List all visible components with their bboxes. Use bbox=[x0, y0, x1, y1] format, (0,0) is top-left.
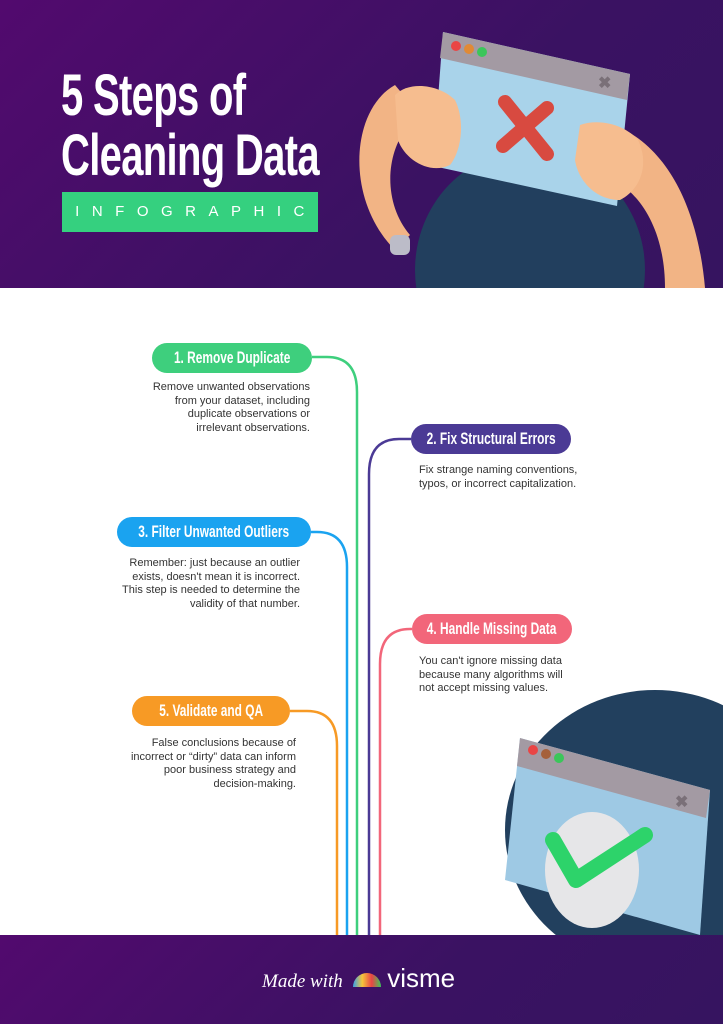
step 4 pill: 4. Handle Missing Data bbox=[427, 619, 557, 638]
step 5 pill: 5. Validate and QA bbox=[159, 701, 263, 720]
step 3 pill bbox=[117, 517, 311, 547]
tag: infographic: INFOGRAPHIC bbox=[75, 203, 317, 220]
illustration: window with checkmark: ✖ bbox=[675, 794, 688, 811]
tag: infographic bbox=[62, 192, 318, 232]
step 3 pill: 3. Filter Unwanted Outliers bbox=[139, 522, 289, 541]
footer bbox=[0, 935, 723, 1024]
title bbox=[61, 63, 320, 188]
step 3 text: Remember: just because an outlier exists, doesn't mean it is incorrect. This step is needed to determine the validity of that number. bbox=[122, 557, 300, 610]
illustration: character holding window with X: ✖ bbox=[598, 75, 611, 92]
step 2 pill: 2. Fix Structural Errors bbox=[427, 429, 555, 448]
step 1 pill bbox=[152, 343, 312, 373]
step 2 pill bbox=[411, 424, 571, 454]
step 4 pill bbox=[412, 614, 572, 644]
step 1 text: Remove unwanted observations from your dataset, including duplicate observations or irrelevant observations. bbox=[153, 381, 310, 434]
step 5 text: False conclusions because of incorrect or “dirty” data can inform poor business strategy and decision-making. bbox=[131, 737, 296, 790]
title: Cleaning Data bbox=[61, 123, 319, 188]
step 2 text: Fix strange naming conventions, typos, or incorrect capitalization. bbox=[419, 464, 577, 490]
header banner bbox=[0, 0, 723, 288]
title: 5 Steps of bbox=[61, 63, 245, 128]
step 5 pill bbox=[132, 696, 290, 726]
illustration: character holding window with X bbox=[359, 32, 705, 288]
footer logo: made with visme: Made with visme bbox=[262, 963, 455, 993]
step 4 text: You can't ignore missing data because many algorithms will not accept missing values. bbox=[419, 655, 563, 694]
step 1 pill: 1. Remove Duplicate bbox=[174, 348, 290, 367]
